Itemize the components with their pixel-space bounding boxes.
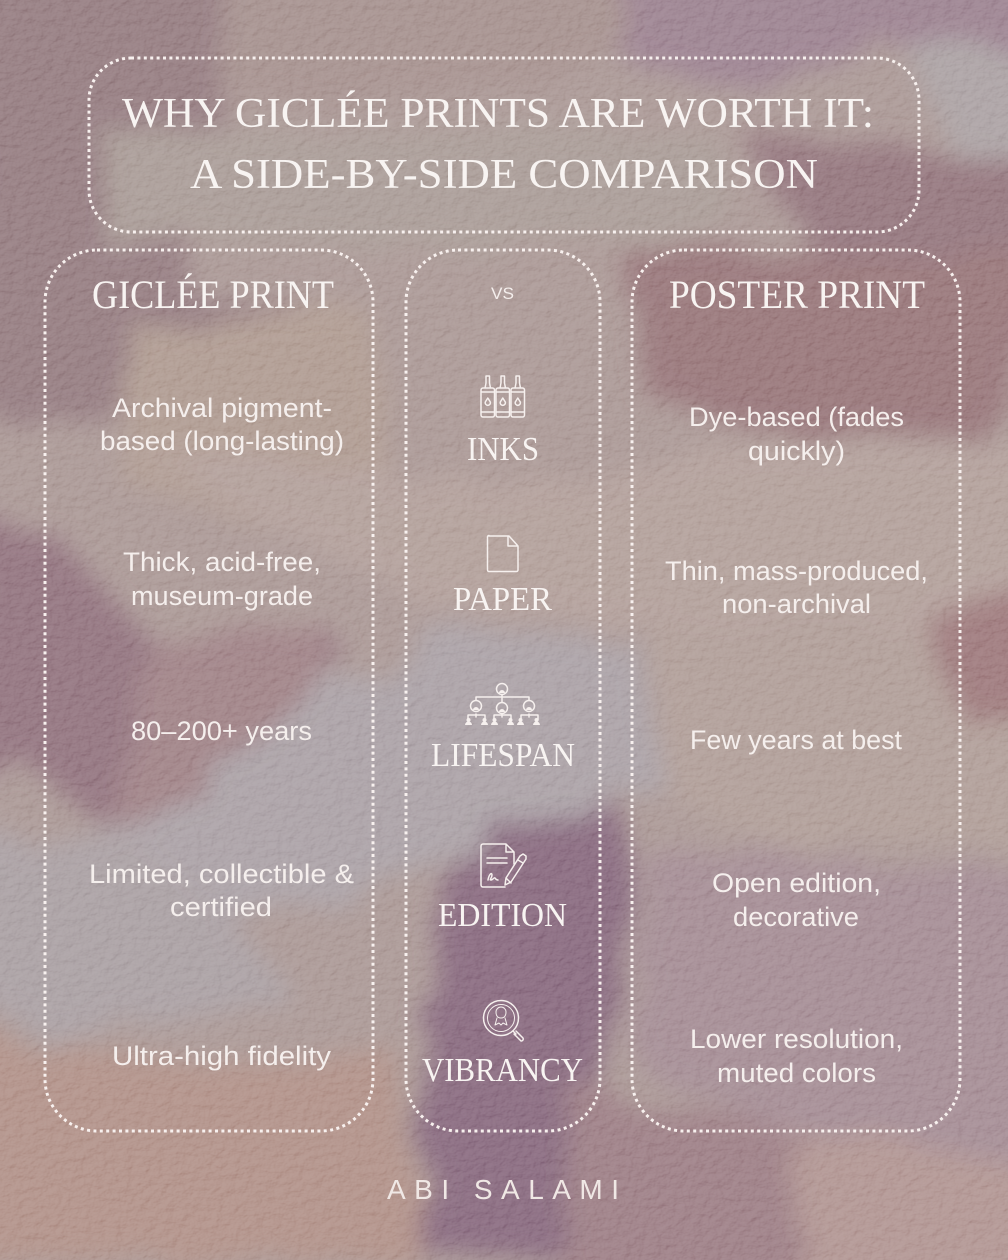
text: giclée lifespan: 80–200+ years: [131, 716, 312, 746]
text: poster inks: quickly): [748, 436, 845, 466]
text: giclée edition: certified: [170, 892, 272, 922]
text: poster vibrancy: Lower resolution,: [690, 1024, 903, 1054]
text: giclée inks: Archival pigment-: [112, 393, 332, 423]
text: giclée inks: based (long-lasting): [100, 426, 344, 456]
text: poster paper: Thin, mass-produced,: [665, 556, 928, 586]
panel: title: [89, 58, 919, 232]
icon: lineage tree: [465, 684, 540, 725]
label: vibrancy: VIBRANCY: [422, 1052, 583, 1089]
text: poster lifespan: Few years at best: [690, 725, 902, 755]
icon: magnifying glass: [484, 1000, 523, 1041]
panel: comparison criteria column: [406, 250, 600, 1131]
icon: certificate and pen: [481, 844, 526, 887]
label: lifespan: LIFESPAN: [431, 737, 575, 774]
text: poster edition: Open edition,: [712, 868, 881, 898]
text: giclée paper: Thick, acid-free,: [123, 547, 321, 577]
text: giclée vibrancy: Ultra-high fidelity: [112, 1041, 332, 1071]
text: giclée edition: Limited, collectible &: [89, 859, 354, 889]
label: inks: INKS: [467, 431, 539, 468]
panel: giclée print column: [45, 250, 373, 1131]
panel: poster print column: [632, 250, 960, 1131]
label: edition: EDITION: [438, 897, 567, 934]
text: poster vibrancy: [690, 1024, 903, 1088]
text: poster paper: [665, 556, 928, 619]
label: paper: PAPER: [453, 581, 552, 618]
text: giclée edition: [89, 859, 354, 922]
panel: title: A SIDE-BY-SIDE COMPARISON: [190, 152, 818, 198]
text: poster paper: non-archival: [722, 589, 871, 619]
text: giclée paper: museum-grade: [131, 581, 313, 611]
heading: poster print: POSTER PRINT: [669, 272, 925, 317]
icon: ink bottles: [481, 376, 524, 417]
text: poster inks: Dye-based (fades: [689, 402, 904, 432]
heading: giclée print: GICLÉE PRINT: [92, 272, 334, 317]
text: giclée inks: [100, 393, 344, 456]
icon: paper sheet: [488, 536, 518, 572]
heading: title: WHY GICLÉE PRINTS ARE WORTH IT:: [122, 90, 874, 137]
label: vs: VS: [491, 284, 514, 303]
text: giclée paper: [123, 547, 321, 611]
text: poster edition: [712, 868, 881, 932]
text: poster edition: decorative: [733, 902, 859, 932]
brand name: ABI SALAMI: [387, 1174, 619, 1205]
text: poster vibrancy: muted colors: [717, 1058, 876, 1088]
text: poster inks: [689, 402, 904, 466]
